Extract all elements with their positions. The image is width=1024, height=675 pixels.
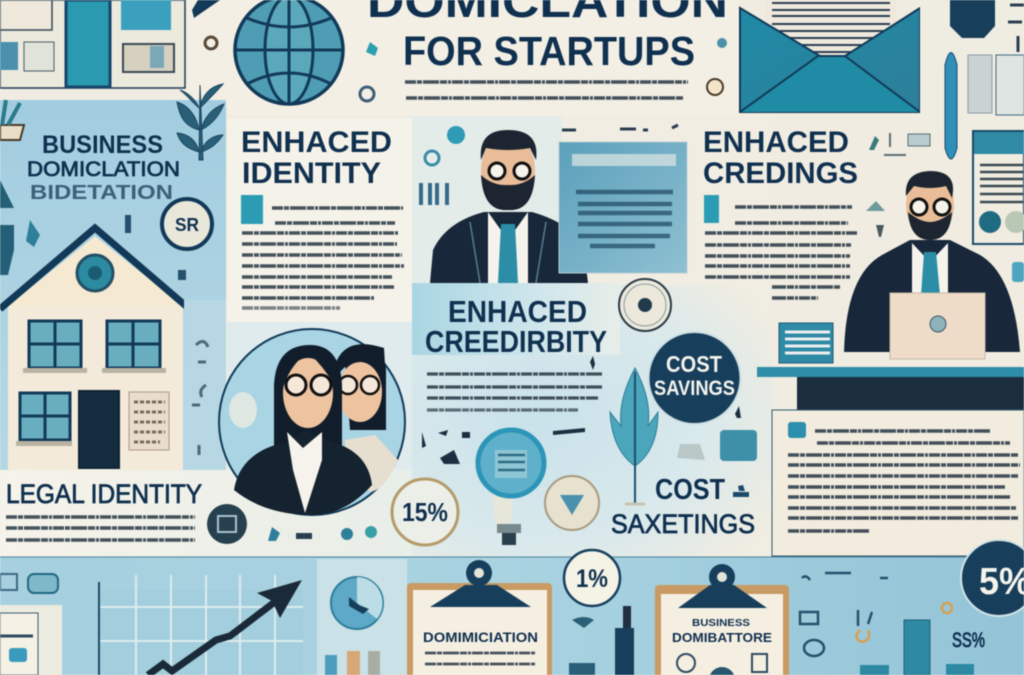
icon: seal badge (619, 279, 671, 331)
illustration: man with tie (430, 130, 588, 283)
heading: legal identity: LEGAL IDENTITY (6, 479, 202, 509)
body text lines (242, 208, 404, 308)
panel: bottom band (0, 557, 1024, 675)
icon: beige medallion (545, 476, 599, 530)
badge: 1 percent (564, 550, 620, 606)
badge: 15 percent: 15% (402, 497, 448, 527)
badge: 15 percent (392, 479, 458, 545)
heading: identity: IDENTITY (242, 157, 381, 190)
panel: top title (186, 0, 740, 116)
body text lines (705, 207, 858, 298)
icon: tag (788, 422, 806, 438)
heading: credings: CREDINGS (703, 157, 858, 190)
badge: SR (175, 215, 199, 235)
illustration: right document (973, 131, 1024, 244)
label: DOMIMICIATION (423, 629, 538, 645)
panel: centre backdrop with man (412, 116, 772, 286)
panel: enhanced credibility (412, 283, 620, 359)
side strip (184, 300, 226, 470)
icons (677, 654, 695, 672)
label: percent note: SS% (952, 629, 985, 652)
icon: barcode (421, 183, 447, 205)
icon: dark marks above screen (562, 125, 678, 130)
badge: 5 percent (961, 540, 1024, 616)
panel: top right desk items (920, 0, 1024, 159)
panel: legal identity (0, 470, 412, 557)
heading: business: BUSINESS (42, 131, 163, 159)
illustration: desk (757, 367, 1024, 410)
label: business: BUSINESS (692, 618, 750, 629)
panel: enhanced credings (703, 126, 858, 298)
body text: credibility (427, 374, 602, 410)
icon: potted plant (0, 100, 24, 275)
illustration: women in circle (219, 329, 405, 515)
icon: book stack (779, 323, 833, 363)
icon: small teal tag (1012, 262, 1024, 282)
icon: small marks beside globe (192, 0, 727, 101)
heading: savings: SAXETINGS (611, 509, 755, 539)
icon: top right glyphs (1008, 5, 1024, 52)
icon: envelope (740, 0, 920, 112)
icon: small marks near legal (268, 526, 377, 541)
illustration: small document card (0, 605, 62, 675)
heading: orientation: BIDETATION (30, 182, 173, 204)
icon: pie dial (331, 577, 383, 629)
icon: small hand mark (733, 485, 749, 497)
panel: cost savings text (772, 410, 1024, 556)
illustration: man at laptop (844, 171, 1020, 359)
illustration: house (0, 228, 226, 470)
icon: laurel plant (177, 84, 224, 160)
chart: small bars (325, 651, 380, 675)
title subtitle lines (405, 82, 688, 98)
heading: enhaced: ENHACED (448, 294, 587, 329)
heading: creedibility: CREEDIRBITY (425, 324, 607, 359)
panel: enhanced identity (227, 118, 412, 322)
heading: enhaced: ENHACED (241, 126, 392, 159)
panel: backdrop below identity (227, 285, 772, 557)
badge: cost savings (648, 332, 740, 424)
icon: marks beside house (192, 341, 208, 455)
heading: cost: COST (655, 474, 725, 506)
icon: bookmark tag (704, 195, 719, 223)
icon: chat bubble (229, 392, 257, 428)
icon: small marks (26, 215, 186, 280)
label: domibattore: DOMIBATTORE (672, 630, 772, 645)
windows (16, 321, 166, 446)
icon: lamp (950, 0, 995, 38)
badge (162, 199, 212, 249)
body text lines (425, 653, 535, 664)
icon: pen (945, 52, 957, 159)
illustration: clipboard one (407, 560, 552, 675)
illustration: screen document (559, 142, 687, 273)
laptop (890, 293, 985, 359)
icon: pen and seal (569, 606, 634, 675)
body text lines (788, 431, 1020, 531)
icon: dark rosette (207, 504, 247, 544)
poster (129, 392, 169, 450)
heading: domiciliation: DOMICLATION (27, 158, 180, 181)
label: cost: COST (666, 351, 722, 377)
icon: large teal leaf (610, 368, 658, 505)
chart: right bars (860, 620, 974, 675)
title: for startups: FOR STARTUPS (403, 28, 695, 74)
door (79, 391, 119, 468)
icon: magnifier bulb (478, 430, 544, 545)
badge: 1 percent: 1% (576, 565, 608, 593)
icons: small marks above man at laptop (866, 133, 930, 237)
chart: growth grid with arrow (99, 575, 303, 675)
icons: scattered bottom right marks (800, 573, 952, 656)
label: savings: SAVINGS (654, 377, 735, 400)
icons: wallet and cap (677, 430, 757, 461)
body text lines (6, 517, 195, 540)
illustration: clipboard two (655, 564, 789, 675)
panel: business domiciliation (0, 100, 226, 472)
icon: paper clip holder (968, 55, 992, 113)
icon: bookmark tag (241, 195, 263, 224)
icon: dark marks (422, 356, 741, 464)
icons: small bottom left marks (0, 574, 58, 593)
arrow (148, 598, 280, 675)
icon: globe (235, 0, 343, 104)
heading: enhaced: ENHACED (703, 126, 849, 159)
panel: top left office shelf (0, 0, 185, 88)
